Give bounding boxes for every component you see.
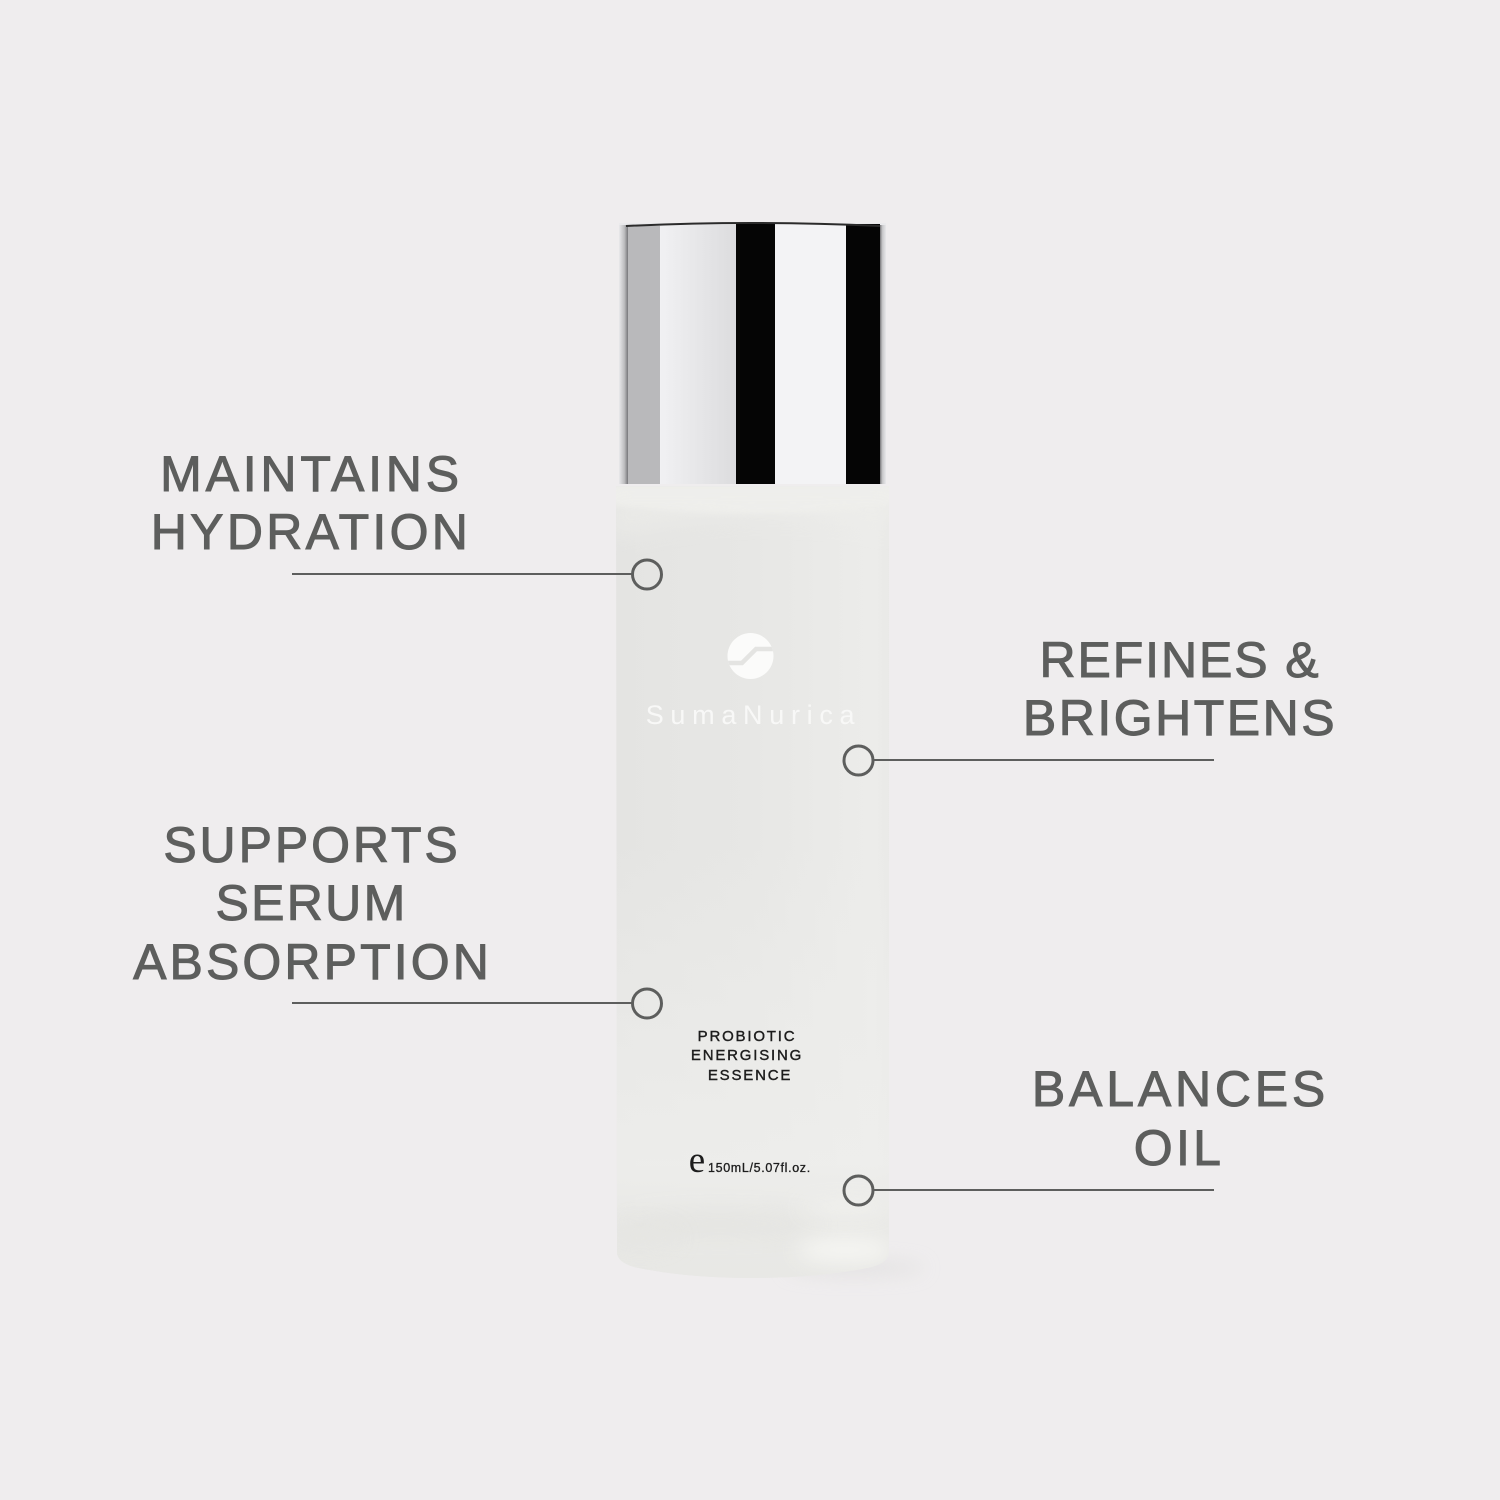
callout: balances oil: OIL xyxy=(1134,1120,1224,1176)
volume label xyxy=(689,1140,811,1181)
callout: refines and brightens: BRIGHTENS xyxy=(1023,690,1337,746)
bottle body xyxy=(616,510,864,1278)
product name: PROBIOTIC xyxy=(698,1028,796,1045)
callout: balances oil xyxy=(844,1061,1329,1205)
product bottle xyxy=(600,223,895,1285)
callout: supports serum absorption: SERUM xyxy=(215,875,408,931)
product name: ENERGISING xyxy=(691,1047,803,1064)
callout: supports serum absorption: SUPPORTS xyxy=(163,817,461,873)
volume label: e xyxy=(689,1140,705,1181)
bottle cap xyxy=(619,223,886,484)
brand logo: swirl mark xyxy=(726,633,776,679)
brand name: SumaNurica xyxy=(646,700,861,730)
volume label: 150mL/5.07fl.oz. xyxy=(708,1161,811,1175)
callout: balances oil: BALANCES xyxy=(1032,1061,1329,1117)
callout: supports serum absorption xyxy=(133,817,662,1018)
callout: maintains hydration xyxy=(151,446,662,589)
callout: maintains hydration: MAINTAINS xyxy=(160,446,463,502)
callout: refines and brightens xyxy=(844,632,1337,775)
callout: supports serum absorption: ABSORPTION xyxy=(133,934,492,990)
callout: refines and brightens: REFINES & xyxy=(1039,632,1321,688)
bottle shadow xyxy=(785,1260,925,1276)
callout: maintains hydration: HYDRATION xyxy=(151,504,471,560)
product name: ESSENCE xyxy=(708,1067,792,1084)
